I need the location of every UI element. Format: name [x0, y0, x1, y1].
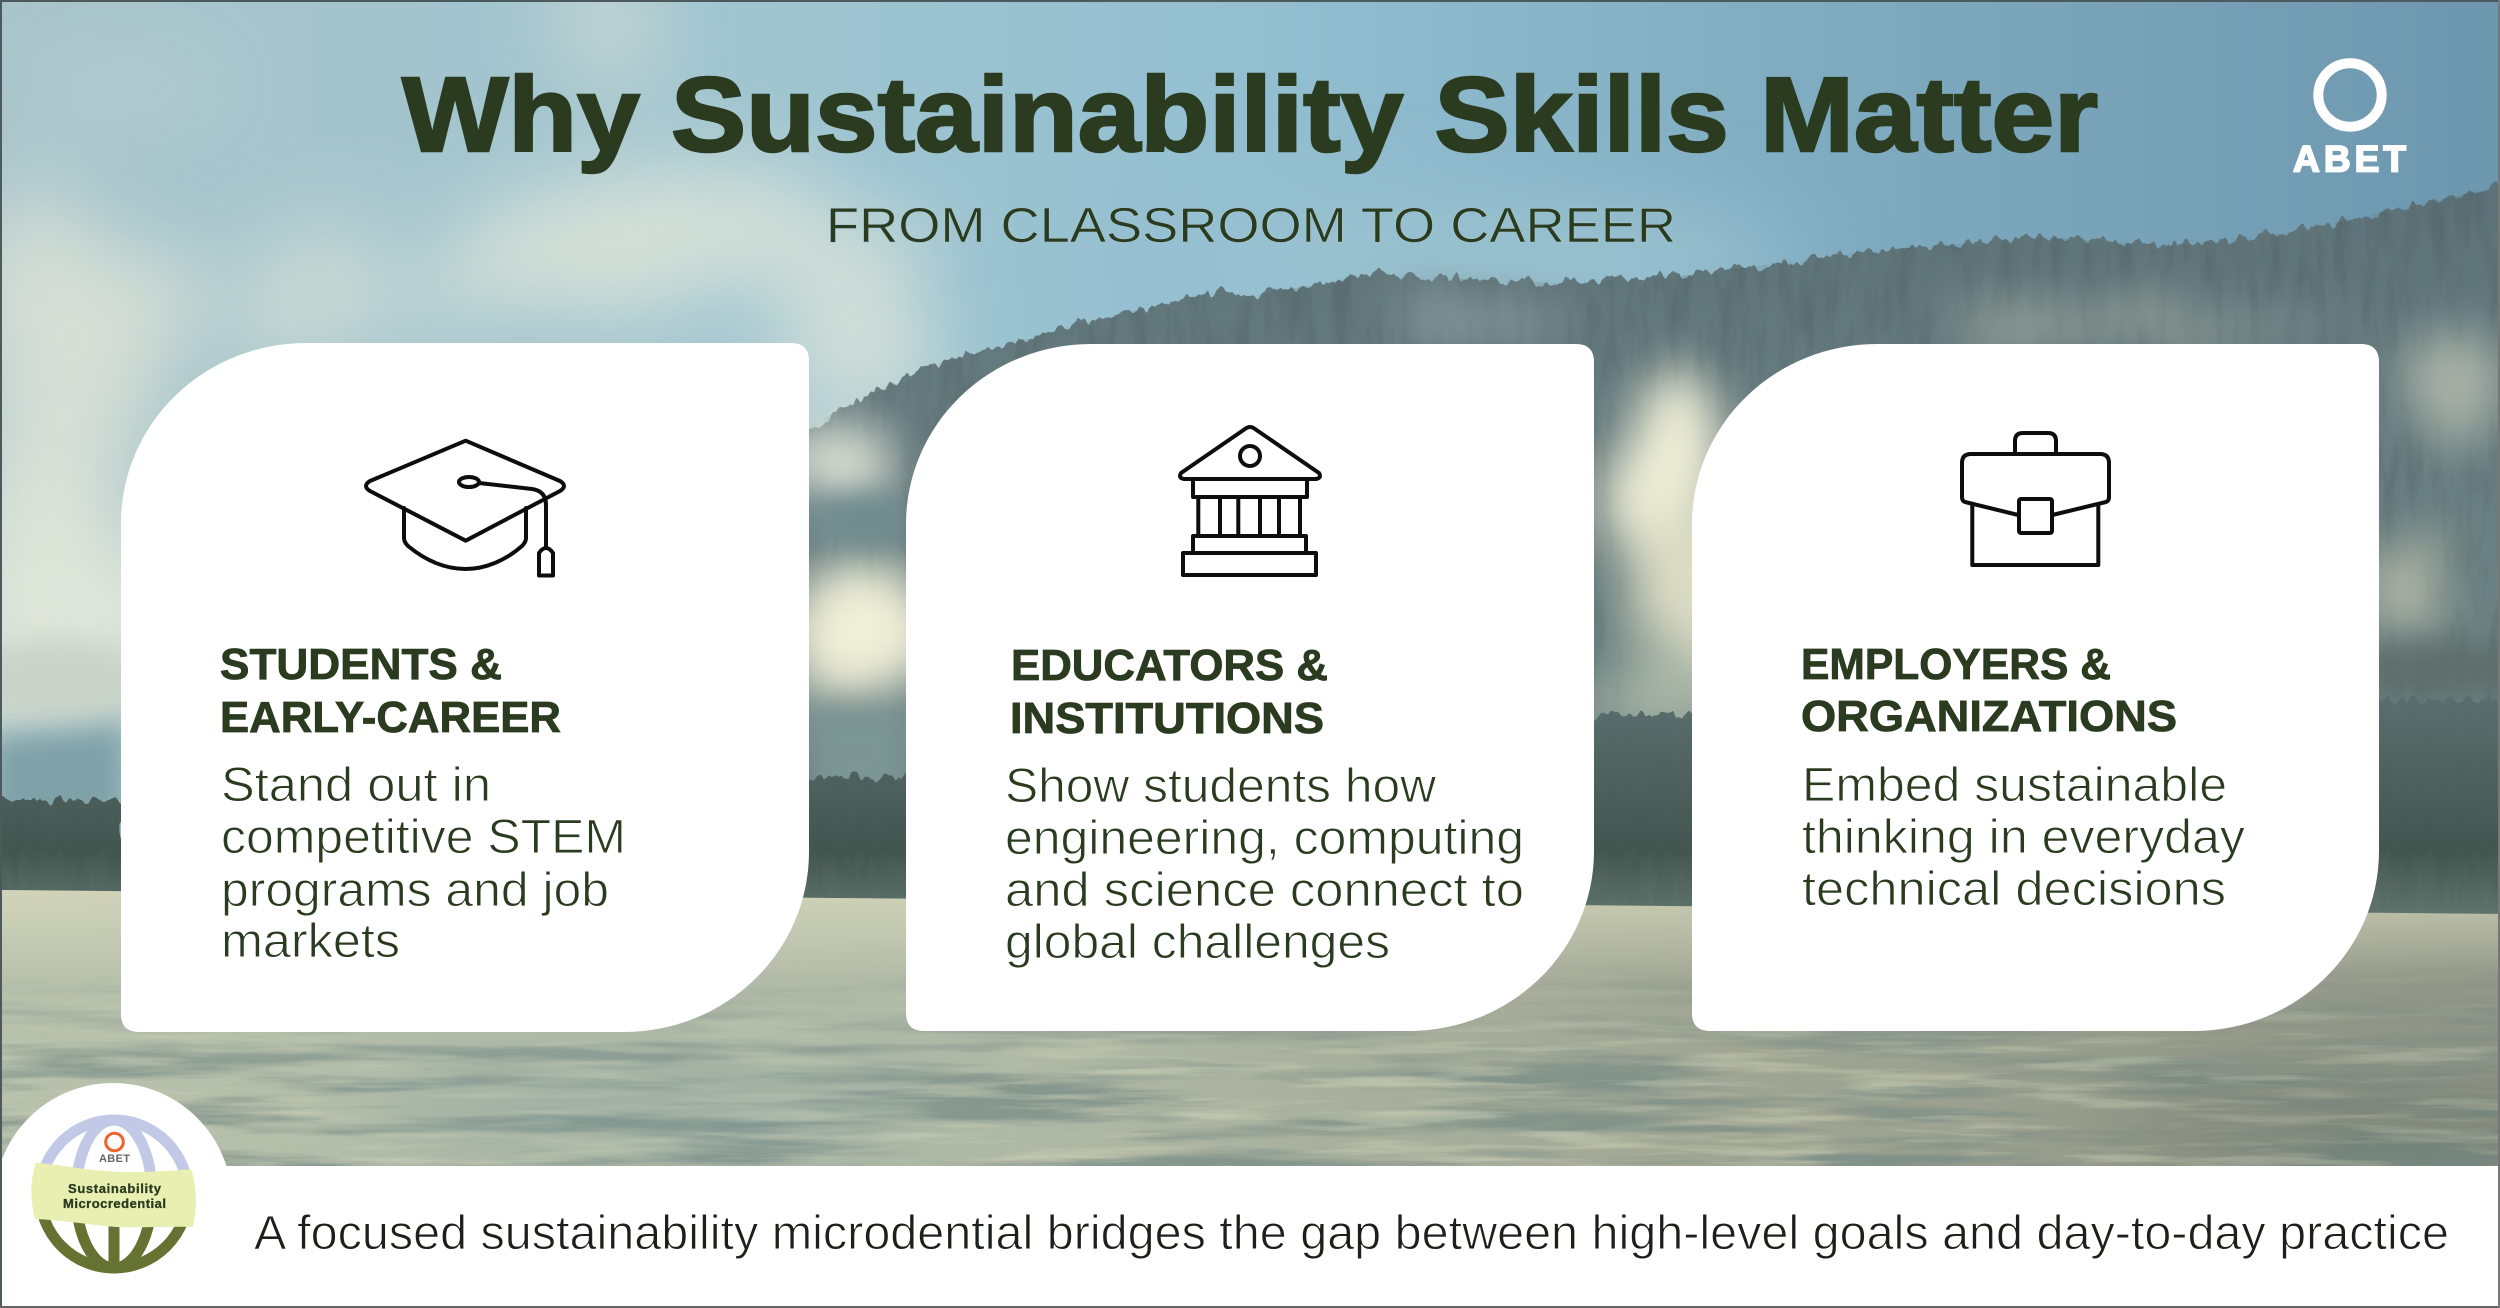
body: employers: Embed sustainable	[1802, 759, 2227, 812]
badge: sustainability microcredential globe: Sustainability	[68, 1181, 162, 1196]
dark tree line	[0, 700, 2500, 960]
logo: ABET white: ABET	[2293, 139, 2406, 180]
badge: sustainability microcredential globe	[2, 1083, 226, 1274]
icon: graduation cap	[366, 441, 564, 576]
body: educators	[1005, 760, 1524, 969]
body: students: Stand out in	[221, 759, 491, 812]
subtitle: FROM CLASSROOM TO CAREER	[826, 199, 1676, 253]
heading: students: STUDENTS &	[220, 640, 502, 689]
heading: employers: EMPLOYERS &	[1801, 640, 2111, 689]
mountain ridge	[780, 178, 2500, 960]
body: employers	[1802, 759, 2245, 916]
panel: employers	[1692, 344, 2379, 1031]
body: educators: engineering, computing	[1005, 812, 1524, 865]
heading: employers	[1801, 640, 2177, 741]
panel: educators	[906, 344, 1594, 1031]
badge: sustainability microcredential globe: Microcredential	[63, 1196, 166, 1211]
water	[0, 890, 2500, 1170]
heading: students: EARLY-CAREER	[220, 693, 561, 742]
body: employers: technical decisions	[1802, 863, 2226, 916]
body: students: programs and job	[221, 864, 609, 917]
body: educators: Show students how	[1005, 760, 1436, 813]
far blue hills and left cloud	[0, 640, 150, 720]
body: educators: and science connect to	[1005, 864, 1524, 917]
body: students: competitive STEM	[221, 811, 626, 864]
heading: students	[220, 640, 561, 742]
icon: briefcase	[1962, 433, 2109, 565]
title: Why Sustainability Skills Matter	[402, 56, 2098, 174]
footer statement: A focused sustainability microdential bridges the gap between high-level goals and day-to-day practice	[254, 1207, 2449, 1260]
heading: educators: EDUCATORS &	[1011, 641, 1328, 690]
heading: educators	[1010, 641, 1328, 743]
body: educators: global challenges	[1005, 916, 1390, 969]
bottom white band	[0, 1166, 2500, 1308]
body: students: markets	[221, 915, 400, 968]
icon: institution building	[1180, 427, 1320, 575]
body: students	[221, 759, 626, 968]
panel: students	[121, 343, 809, 1032]
logo: ABET white	[2293, 63, 2406, 180]
heading: employers: ORGANIZATIONS	[1801, 692, 2177, 741]
heading: educators: INSTITUTIONS	[1010, 694, 1324, 743]
badge: sustainability microcredential globe: ABET	[99, 1153, 130, 1165]
body: employers: thinking in everyday	[1802, 811, 2245, 864]
